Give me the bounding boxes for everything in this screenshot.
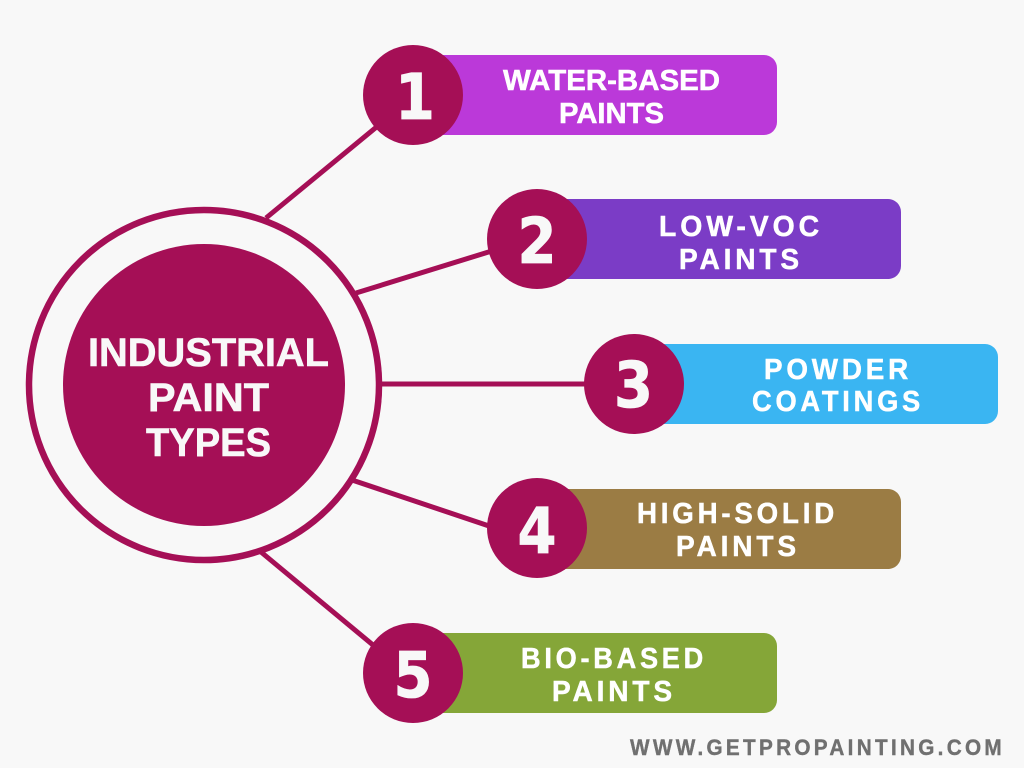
item 4: 4 [518, 495, 556, 568]
central hub [29, 210, 379, 560]
item 1: WATER-BASED [503, 65, 720, 97]
hub title: PAINT [148, 376, 269, 420]
item 4: PAINTS [676, 531, 800, 563]
item 3: 3 [614, 349, 653, 422]
item 2: PAINTS [679, 244, 803, 276]
item 2: LOW-VOC [659, 211, 823, 243]
item 3 [584, 334, 998, 434]
item 5: BIO-BASED [521, 643, 707, 675]
item 1: 1 [395, 61, 435, 134]
item 1 [363, 45, 777, 145]
connector lines [261, 120, 590, 655]
item 3: POWDER [764, 354, 912, 386]
website footer: WWW.GETPROPAINTING.COM [630, 735, 1005, 760]
item 5: PAINTS [552, 676, 676, 708]
hub title: INDUSTRIAL [88, 331, 329, 375]
hub title: TYPES [146, 421, 271, 465]
item 5 [363, 623, 777, 723]
hub title [88, 331, 329, 465]
item 2: 2 [518, 205, 556, 278]
item 4 [487, 478, 901, 578]
item 1: PAINTS [559, 98, 664, 130]
item 3: COATINGS [752, 386, 924, 418]
item 2 [487, 189, 901, 289]
item 4: HIGH-SOLID [637, 498, 838, 530]
item 5: 5 [394, 639, 432, 712]
